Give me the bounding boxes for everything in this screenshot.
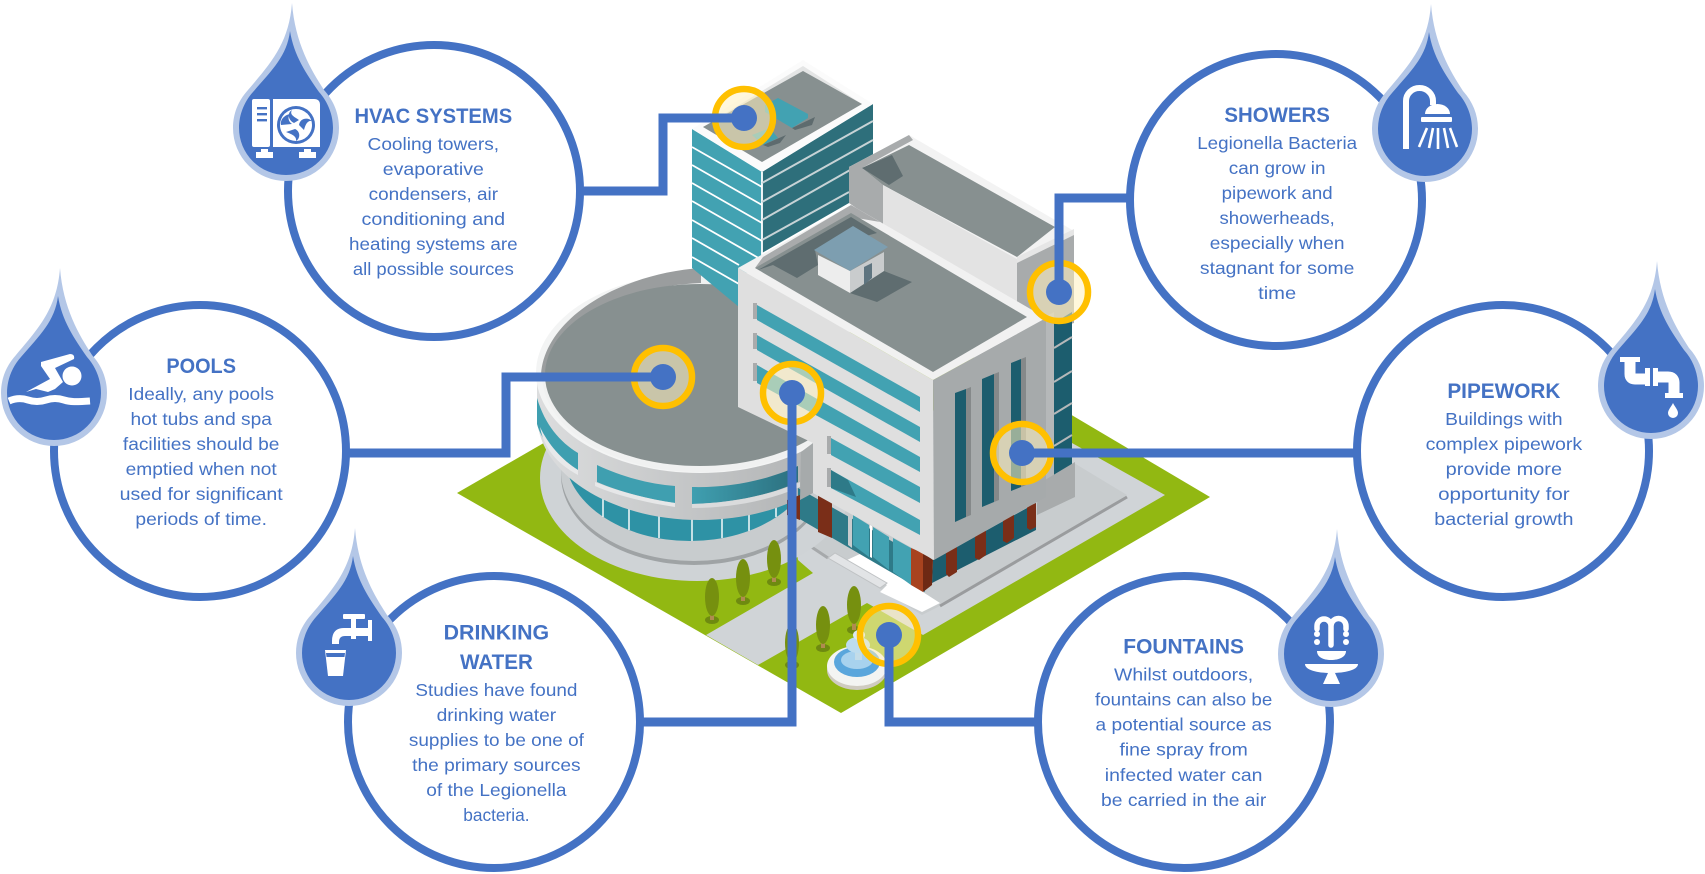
body text: infected water can xyxy=(1105,765,1262,785)
body text: opportunity for xyxy=(1438,484,1570,504)
body text: of the Legionella xyxy=(426,780,567,800)
body text: Cooling towers, xyxy=(368,134,499,154)
icon: HVAC unit xyxy=(233,3,339,181)
connector: fountains xyxy=(889,635,1037,722)
body text: fine spray from xyxy=(1119,740,1248,760)
heading: DRINKING xyxy=(444,621,549,644)
body text xyxy=(120,384,283,529)
heading: PIPEWORK xyxy=(1447,380,1561,403)
body text: provide more xyxy=(1446,459,1562,479)
connector: drinking water xyxy=(640,393,792,722)
panel: showers xyxy=(1130,4,1478,346)
body text xyxy=(1197,133,1358,303)
body text: Whilst outdoors, xyxy=(1114,665,1253,685)
round wing xyxy=(536,268,864,581)
body text: complex pipework xyxy=(1426,434,1583,454)
panel: pipework xyxy=(1357,261,1704,597)
body text: condensers, air xyxy=(369,184,498,204)
body text: emptied when not xyxy=(126,459,277,479)
icon: pipes xyxy=(1598,261,1704,439)
panel: drinking water xyxy=(296,528,640,868)
body text: stagnant for some xyxy=(1200,258,1354,278)
entrance steps xyxy=(828,553,940,612)
back block xyxy=(849,135,1074,340)
body text: Buildings with xyxy=(1445,409,1563,429)
panel: HVAC systems xyxy=(233,3,580,337)
body text xyxy=(1426,409,1583,529)
body text: heating systems are xyxy=(349,234,518,254)
heading: FOUNTAINS xyxy=(1123,636,1244,659)
body text: the primary sources xyxy=(412,755,581,775)
teal window bands xyxy=(753,303,920,535)
side glazing and annex xyxy=(1037,312,1075,515)
connector: showers xyxy=(1059,198,1131,292)
ground floor glazing and columns xyxy=(787,488,1036,592)
connector: HVAC xyxy=(580,118,744,191)
roof hut xyxy=(814,226,888,293)
body text xyxy=(1095,665,1272,810)
body text: bacteria. xyxy=(463,805,530,825)
icon: swimmer xyxy=(1,268,107,446)
green ground xyxy=(457,275,1210,713)
body text: evaporative xyxy=(383,159,484,179)
body text: supplies to be one of xyxy=(409,730,584,750)
connector: pools xyxy=(347,377,663,453)
main building xyxy=(738,205,1075,592)
body text xyxy=(349,134,518,279)
heading xyxy=(444,621,549,674)
heading: WATER xyxy=(460,651,533,674)
icon: fountain xyxy=(1278,529,1384,707)
panel: fountains xyxy=(1038,529,1384,868)
body text: Ideally, any pools xyxy=(128,384,274,404)
body text: hot tubs and spa xyxy=(130,409,272,429)
body text: facilities should be xyxy=(123,434,279,454)
body text: Legionella Bacteria xyxy=(1197,133,1358,153)
target markers xyxy=(634,89,1088,664)
body text: Studies have found xyxy=(415,680,577,700)
trees xyxy=(705,540,861,669)
body text xyxy=(409,680,584,825)
icon: tap and glass xyxy=(296,528,402,706)
panel: pools xyxy=(1,268,346,597)
body text: time xyxy=(1258,283,1296,303)
fountain xyxy=(827,630,887,690)
body text: be carried in the air xyxy=(1101,790,1267,810)
isometric building illustration xyxy=(457,60,1210,713)
heading: HVAC SYSTEMS xyxy=(354,105,512,128)
icon: shower xyxy=(1372,4,1478,182)
connector: pipework xyxy=(1022,448,1357,458)
body text: used for significant xyxy=(120,484,283,504)
body text: showerheads, xyxy=(1220,208,1335,228)
roof xyxy=(738,205,1046,380)
body text: can grow in xyxy=(1229,158,1326,178)
heading: SHOWERS xyxy=(1224,104,1330,127)
body text: drinking water xyxy=(437,705,557,725)
body text: all possible sources xyxy=(353,259,514,279)
body text: a potential source as xyxy=(1096,715,1272,735)
body text: especially when xyxy=(1210,233,1345,253)
tall tower xyxy=(692,60,873,307)
body text: pipework and xyxy=(1222,183,1333,203)
body text: fountains can also be xyxy=(1095,690,1272,710)
body text: bacterial growth xyxy=(1434,509,1573,529)
body text: periods of time. xyxy=(135,509,267,529)
body text: conditioning and xyxy=(362,209,505,229)
heading: POOLS xyxy=(166,355,236,378)
vertical windows xyxy=(955,357,1026,522)
pavement and walkway xyxy=(706,400,1165,665)
